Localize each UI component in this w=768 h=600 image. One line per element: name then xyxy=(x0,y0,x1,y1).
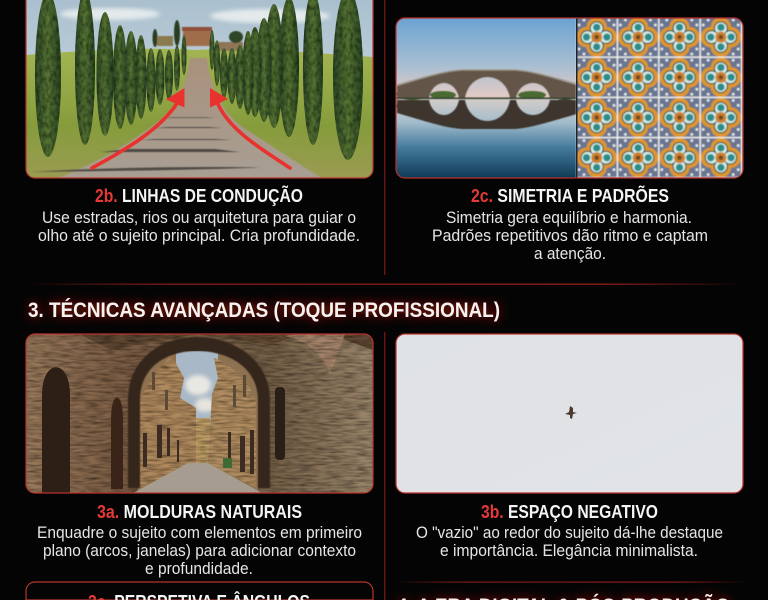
panel: 3b negative space xyxy=(396,334,743,560)
photo frame xyxy=(396,334,743,493)
horizontal divider xyxy=(28,284,744,285)
description 3b xyxy=(416,524,723,560)
photo: bridge reflection and tiles xyxy=(396,18,743,178)
arrow right xyxy=(210,88,290,168)
photo: stone archway street xyxy=(26,334,373,493)
description 3b: e importância. Elegância minimalista. xyxy=(440,542,698,560)
horizontal divider right xyxy=(396,582,746,583)
panel: 2c symmetry and patterns xyxy=(396,18,743,263)
description 2c xyxy=(432,209,708,263)
villa xyxy=(152,20,243,51)
description 3b: O "vazio" ao redor do sujeito dá-lhe destaque xyxy=(416,524,723,542)
vertical divider upper xyxy=(384,0,385,275)
description 3a: Enquadre o sujeito com elementos em primeiro xyxy=(37,524,362,542)
panel: 3c perspective and angles xyxy=(26,582,373,600)
road shadows xyxy=(30,117,262,172)
bridge xyxy=(396,70,578,129)
arch xyxy=(128,337,270,488)
description 2c: Simetria gera equilíbrio e harmonia. xyxy=(446,209,692,227)
panel: 2b leading lines xyxy=(26,0,373,245)
description 2b: olho até o sujeito principal. Cria profundidade. xyxy=(38,227,360,245)
arrow left xyxy=(92,88,184,168)
description 2c: Padrões repetitivos dão ritmo e captam xyxy=(432,227,708,245)
description 2b xyxy=(38,209,360,245)
heading 2b: 2b. LINHAS DE CONDUÇÃO xyxy=(95,185,303,206)
description 3a xyxy=(37,524,362,578)
card frame xyxy=(26,582,373,600)
description 2b: Use estradas, rios ou arquitetura para guiar o xyxy=(42,209,356,227)
photo frame xyxy=(26,334,373,493)
heading: section 3: 3. TÉCNICAS AVANÇADAS (TOQUE PROFISSIONAL) xyxy=(28,297,500,322)
street view through arch xyxy=(138,351,258,493)
doors and window xyxy=(42,367,70,493)
photo: bird in empty sky xyxy=(396,334,743,493)
heading 3a: 3a. MOLDURAS NATURAIS xyxy=(97,501,302,522)
photo frame xyxy=(396,18,743,178)
photo: cypress road with arrows xyxy=(26,0,373,178)
description 2c: a atenção. xyxy=(534,245,606,263)
heading 3b: 3b. ESPAÇO NEGATIVO xyxy=(481,501,658,522)
trees xyxy=(35,0,363,160)
heading 2c: 2c. SIMETRIA E PADRÕES xyxy=(471,185,669,206)
icon: bird xyxy=(565,406,577,419)
panel: 3a natural frames xyxy=(26,334,373,578)
photo frame xyxy=(26,0,373,178)
description 3a: e profundidade. xyxy=(145,560,253,578)
vertical divider lower xyxy=(384,332,385,600)
description 3a: plano (arcos, janelas) para adicionar contexto xyxy=(43,542,356,560)
